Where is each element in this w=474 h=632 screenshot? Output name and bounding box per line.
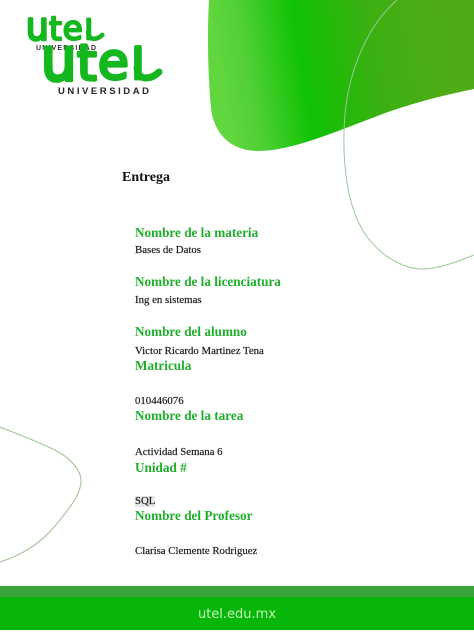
heading: tarea: Nombre de la tarea	[135, 408, 243, 423]
footer url: utel.edu.mx	[198, 607, 276, 622]
value: licenciatura: Ing en sistemas	[135, 294, 202, 306]
footer upper stripe	[0, 586, 474, 597]
thin curve: left	[0, 427, 81, 562]
value: profesor: Clarisa Clemente Rodriguez	[135, 545, 257, 557]
logo: large utel: UNIVERSIDAD	[58, 86, 149, 97]
title: Entrega	[122, 170, 170, 185]
logo: small utel: t	[49, 10, 62, 48]
logo: small utel: l	[84, 15, 93, 47]
logo: large utel: u	[41, 24, 76, 94]
heading: matricula: Matricula	[135, 358, 191, 373]
value: alumno: Victor Ricardo Martinez Tena	[135, 345, 264, 357]
heading: materia: Nombre de la materia	[135, 225, 258, 240]
logo: large utel: l	[131, 40, 145, 89]
heading: unidad: Unidad #	[135, 460, 187, 475]
heading: profesor: Nombre del Profesor	[135, 508, 252, 523]
logo: small utel: u	[26, 4, 49, 49]
footer main bar	[0, 597, 474, 630]
logo: small utel: UNIVERSIDAD	[36, 45, 96, 52]
value: materia: Bases de Datos	[135, 244, 201, 256]
value: tarea: Actividad Semana 6	[135, 446, 223, 458]
logo: large utel: e	[98, 33, 129, 91]
logo: large utel: t	[77, 34, 97, 92]
heading: alumno: Nombre del alumno	[135, 324, 247, 339]
thin curve: right	[344, 0, 474, 269]
value: matricula: 010446076	[135, 395, 184, 407]
logo: small utel: e	[63, 9, 83, 47]
value: unidad: SQL	[135, 495, 155, 507]
footer band	[0, 586, 474, 632]
heading: licenciatura: Nombre de la licenciatura	[135, 274, 281, 289]
green blob	[208, 0, 474, 151]
